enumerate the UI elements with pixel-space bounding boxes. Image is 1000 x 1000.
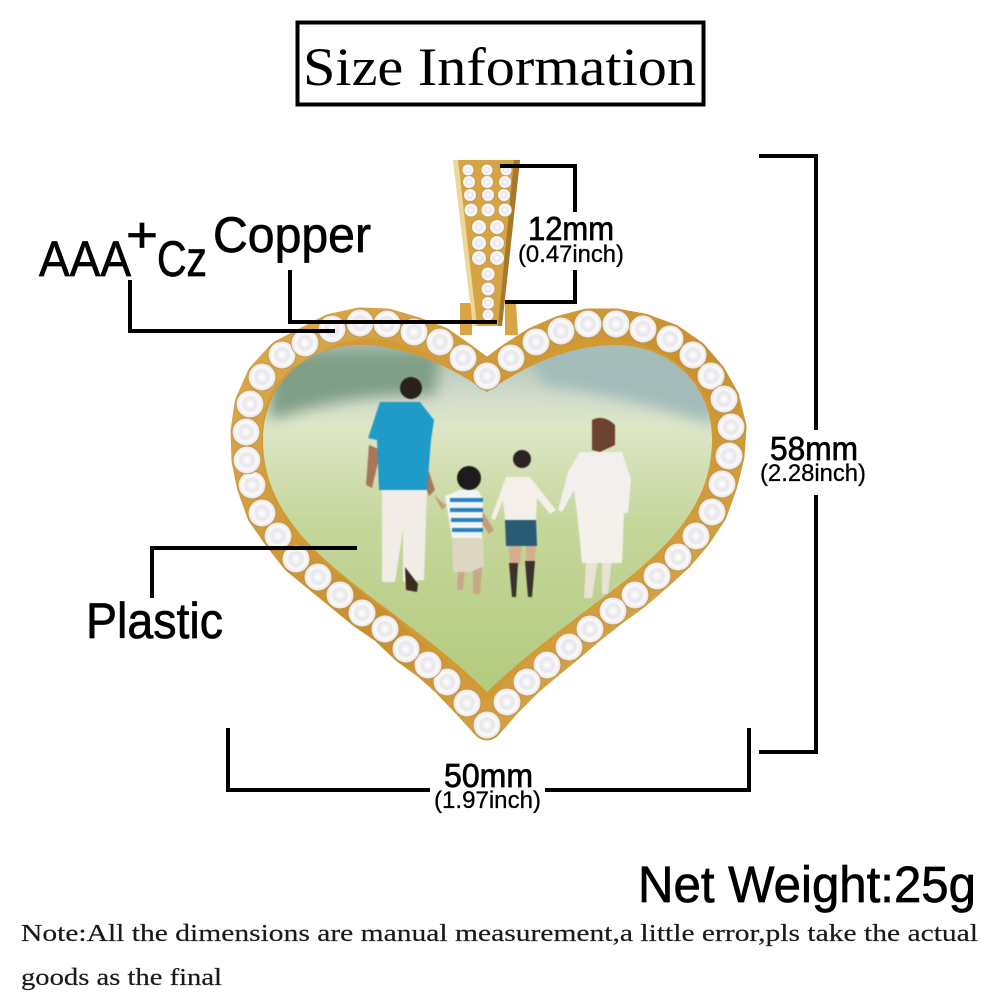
note: goods as the final — [21, 965, 222, 991]
dimension: height 58mm: 58mm — [770, 430, 858, 467]
callout: Plastic — [86, 548, 357, 649]
dimension: bail 12mm: (0.47inch) — [518, 241, 624, 268]
heart gold frame — [246, 323, 731, 725]
dimension: width 50mm: (1.97inch) — [434, 787, 541, 814]
dimension: bail 12mm: 12mm — [528, 210, 614, 247]
photo figures — [366, 377, 631, 598]
photo: family in a meadow — [255, 340, 720, 700]
callout: AAA+ Cz: AAA — [39, 231, 132, 287]
callout: Copper — [213, 207, 497, 322]
dimension: bail 12mm — [500, 166, 624, 302]
heart stone setting — [232, 309, 745, 739]
pendant bail — [453, 160, 520, 335]
girl — [491, 450, 556, 597]
boy — [434, 466, 494, 594]
callout: AAA+ Cz — [39, 207, 335, 331]
man — [366, 377, 435, 592]
callout: AAA+ Cz: + — [126, 207, 158, 263]
note — [21, 921, 978, 991]
callout: AAA+ Cz: Cz — [157, 231, 207, 287]
title — [298, 22, 704, 104]
dimension: width 50mm: 50mm — [444, 757, 533, 794]
photo background trees — [270, 345, 715, 425]
callout: Copper: Copper — [213, 207, 371, 263]
note: Note:All the dimensions are manual measurement,a little error,pls take the actual — [21, 921, 978, 947]
net weight: Net Weight:25g — [638, 856, 976, 913]
title: Size Information — [303, 37, 696, 97]
dimension: height 58mm — [759, 156, 866, 752]
dimension: width 50mm — [228, 728, 749, 814]
dimension: height 58mm: (2.28inch) — [760, 460, 866, 487]
callout: Plastic: Plastic — [86, 593, 223, 649]
woman — [558, 418, 631, 598]
